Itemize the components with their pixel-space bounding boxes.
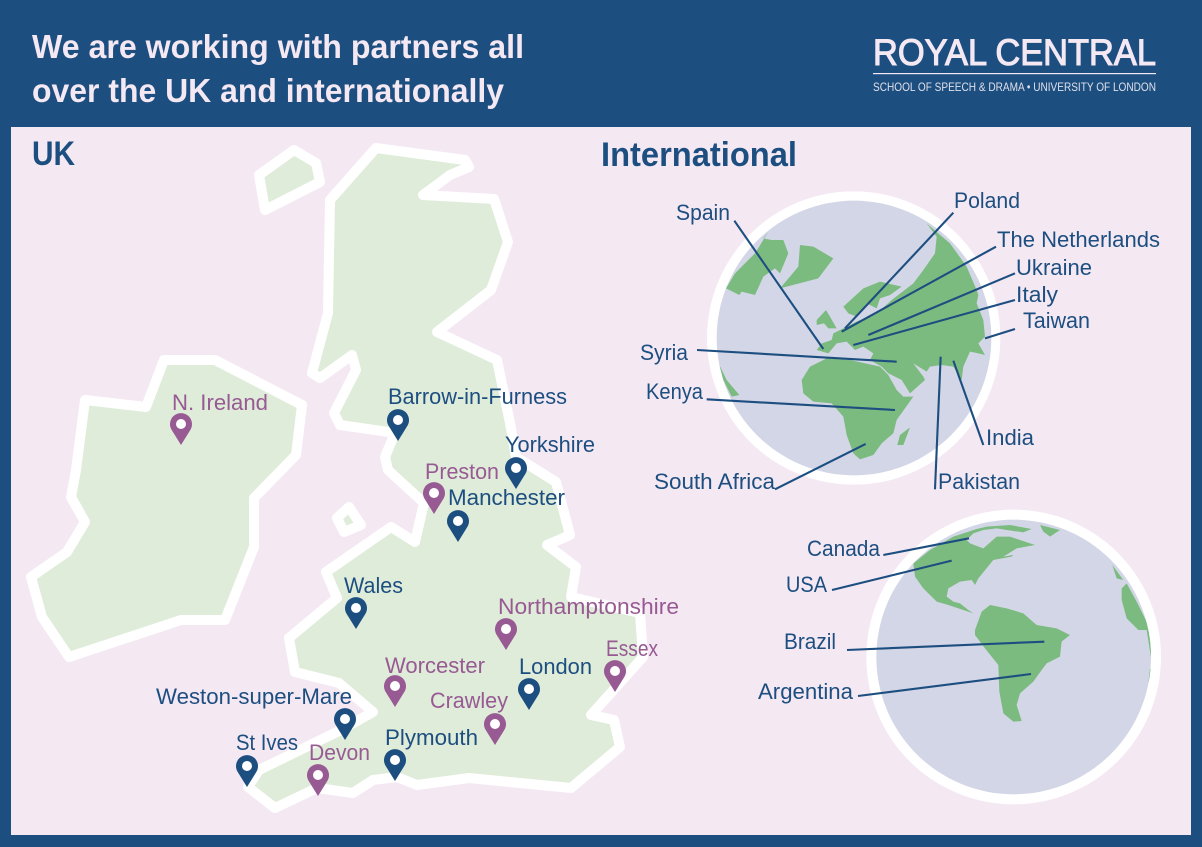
pin: Essex: Essex [606,636,658,661]
pin: London: London [519,654,592,679]
pin: Yorkshire: Yorkshire [505,432,595,457]
pin: Plymouth: Plymouth [385,725,478,750]
labels: international countries: Syria [640,340,689,365]
pin: Plymouth [384,725,478,781]
labels: Americas countries: Argentina [758,679,854,704]
logo: Royal Central: SCHOOL OF SPEECH & DRAMA • UNIVERSITY OF LONDON [873,80,1156,94]
map: Ireland [31,360,302,657]
pin: N. Ireland [170,390,268,445]
labels: Americas countries: Canada [807,536,881,561]
pin: Preston: Preston [425,459,499,484]
globe: Europe, Africa and Asia [697,191,1015,489]
labels: international countries: Poland [954,188,1020,213]
pin: Crawley: Crawley [430,688,508,713]
pin: Devon: Devon [309,740,370,765]
pin: Northamptonshire: Northamptonshire [498,594,679,619]
pin: Northamptonshire [495,594,679,650]
title [32,28,524,109]
pin: Yorkshire [505,432,595,489]
labels: international countries: Ukraine [1016,255,1092,280]
labels: international countries: India [986,425,1035,450]
logo: Royal Central: ROYAL CENTRAL [873,32,1156,73]
pin: Crawley [430,688,508,745]
pin: Weston-super-Mare [156,684,356,740]
title: We are working with partners all [32,28,524,65]
labels: Americas countries [758,536,881,704]
pin: Manchester: Manchester [448,485,565,510]
leader lines [697,213,1015,489]
pin: Wales: Wales [344,573,403,598]
labels: international countries: Kenya [646,379,704,404]
pin: Barrow-in-Furness: Barrow-in-Furness [388,384,567,409]
pin: St Ives: St Ives [236,730,298,755]
pin: N. Ireland: N. Ireland [172,390,268,415]
labels: international countries: Pakistan [938,469,1020,494]
labels: international countries [640,188,1160,494]
map: Outer Hebrides [259,150,320,210]
pin: London [518,654,592,710]
labels: international countries: Taiwan [1023,308,1090,333]
title: over the UK and internationally [32,72,505,109]
heading: International: International [601,136,797,174]
pin: St Ives [236,730,298,787]
labels: Americas countries: USA [786,572,827,597]
globe ring [866,510,1161,804]
landmasses [913,525,1152,722]
pin: Manchester [447,485,565,542]
globe ring [707,191,1000,485]
pin: Devon [307,740,370,796]
leader lines [832,538,1044,696]
landmasses [719,223,985,459]
pin: Barrow-in-Furness [387,384,567,441]
map: Isle of Man [337,507,361,532]
labels: international countries: South Africa [654,469,776,494]
logo: Royal Central [873,32,1156,94]
labels: Americas countries: Brazil [784,629,836,654]
labels: international countries: Italy [1016,282,1058,307]
pin: Preston [423,459,499,514]
pin: Worcester [384,653,485,707]
labels: international countries: The Netherlands [997,227,1160,252]
globe ocean [717,201,991,475]
pin: Weston-super-Mare: Weston-super-Mare [156,684,352,709]
globe: the Americas [832,510,1161,804]
pin: Essex [604,636,658,692]
labels: international countries: Spain [676,200,730,225]
globe ocean [876,520,1151,794]
map: Great Britain [248,148,643,808]
pin: Wales [344,573,403,629]
heading: UK: UK [32,135,75,173]
pin: Worcester: Worcester [385,653,485,678]
map: UK and Ireland [31,148,643,808]
